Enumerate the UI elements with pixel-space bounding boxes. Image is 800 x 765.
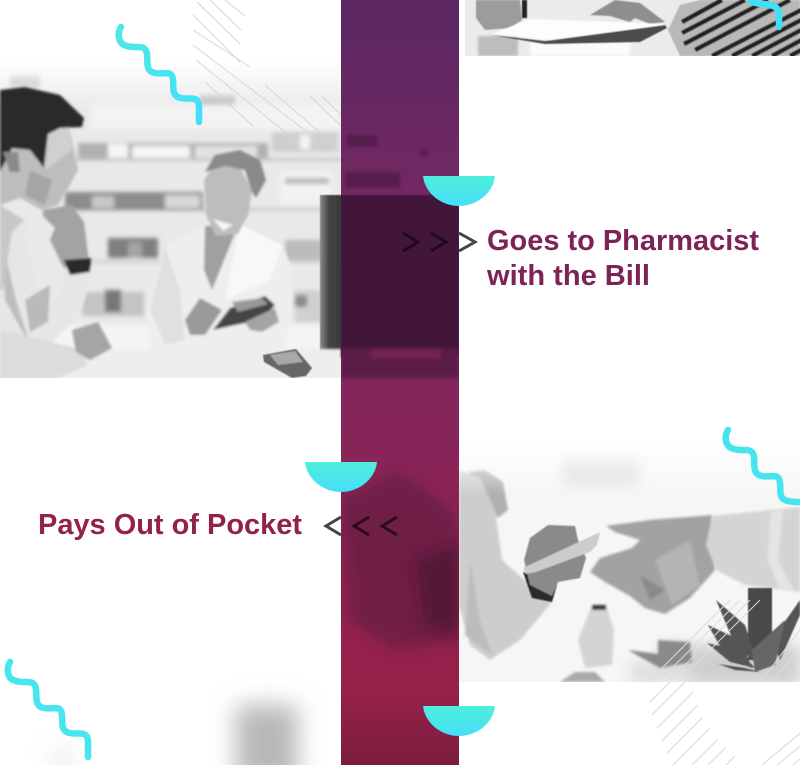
semicircle marker: top — [423, 176, 495, 206]
wave: top centre — [119, 27, 199, 122]
soft blur shape: bottom left — [55, 705, 298, 765]
heading: goes to pharmacist — [486, 225, 759, 292]
plant — [707, 588, 800, 672]
striped sleeve — [668, 0, 800, 56]
bottle — [578, 605, 614, 668]
photo: card payment hands — [459, 440, 800, 685]
hatch pattern: top left — [193, 0, 341, 150]
wave: right — [726, 430, 800, 502]
customer — [0, 87, 112, 378]
tray — [560, 640, 692, 682]
card reader on counter — [263, 349, 312, 378]
wave: bottom left — [8, 662, 88, 757]
heading: pays out of pocket: Pays Out of Pocket — [38, 509, 302, 541]
silhouette under band — [341, 472, 459, 650]
semicircle marker: bottom — [423, 706, 495, 736]
arrows: right-pointing chevrons — [403, 233, 475, 251]
person in background — [459, 470, 552, 660]
monitor — [319, 194, 341, 358]
wave: top right — [750, 0, 779, 27]
photo: customer and pharmacist at counter — [0, 60, 350, 378]
hand holding card — [523, 525, 600, 602]
semicircle marker: middle — [305, 462, 377, 492]
open hand — [590, 515, 715, 614]
hatch pattern: bottom right — [649, 682, 800, 765]
band overlay: tinted photo details — [341, 135, 459, 650]
heading: goes to pharmacist: with the Bill — [486, 260, 650, 292]
arrows: left-pointing chevrons — [326, 517, 397, 535]
sleeve — [706, 507, 800, 592]
pharmacist — [146, 150, 292, 350]
hands — [476, 0, 667, 44]
clipboard — [492, 19, 665, 40]
central gradient band — [341, 0, 459, 765]
photo: signing a clipboard — [465, 0, 800, 56]
counter — [320, 347, 341, 359]
heading: goes to pharmacist: Goes to Pharmacist — [487, 225, 759, 257]
